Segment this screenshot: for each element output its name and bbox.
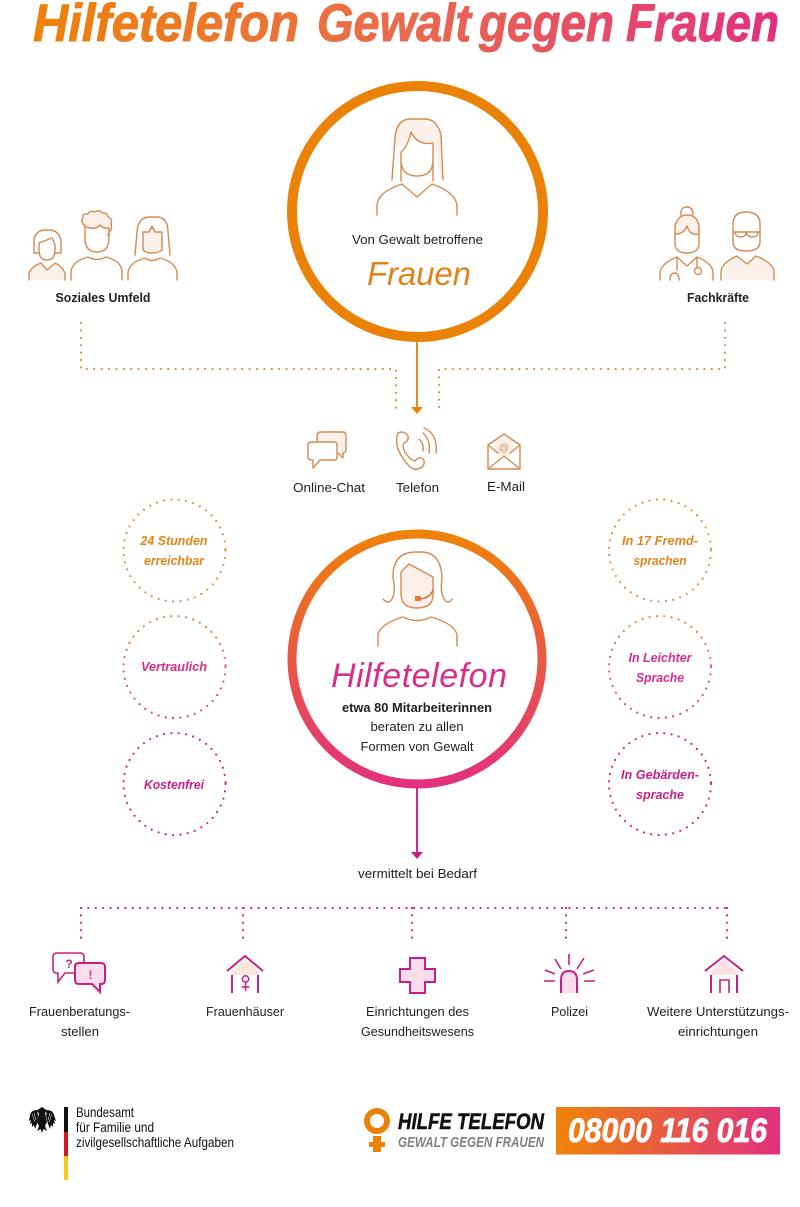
panel: affected women circle — [292, 86, 543, 337]
badge: Vertraulich: Vertraulich — [141, 660, 207, 674]
icon: speech bubbles: ! — [88, 968, 92, 982]
text: Bundesamt name — [76, 1104, 234, 1150]
text: Bundesamt name: zivilgesellschaftliche Aufgaben — [76, 1134, 234, 1150]
panel: Frauenhäuser — [206, 956, 285, 1019]
icon: speech bubbles: ? — [65, 957, 73, 971]
flag bar — [64, 1107, 68, 1180]
icon: three people — [29, 211, 177, 280]
badge: In 17 Fremdsprachen: In 17 Fremd- — [622, 534, 698, 548]
title — [33, 0, 779, 53]
text: Bundesamt name: Bundesamt — [76, 1104, 134, 1120]
badge: Kostenfrei — [124, 733, 226, 835]
badge: Vertraulich — [124, 616, 226, 718]
connector: right dotted line — [439, 323, 725, 412]
badge: In Leichter Sprache — [609, 616, 711, 718]
text: von Gewalt betroffene: Von Gewalt betroffene — [352, 232, 483, 247]
icon: doctors — [660, 207, 774, 280]
label: Einrichtungen des: Einrichtungen des — [366, 1004, 469, 1019]
label: Gesundheitswesens: Gesundheitswesens — [361, 1024, 474, 1039]
phone number box: 08000 116 016 — [568, 1112, 768, 1150]
panel: Polizei — [544, 954, 595, 1019]
text: vermittelt bei Bedarf: vermittelt bei Bedarf — [358, 866, 477, 881]
text: beraten zu allen: beraten zu allen — [370, 719, 464, 734]
arrow: to channels — [411, 341, 423, 414]
icon: telephone — [397, 428, 436, 469]
text: Hilfetelefon: Hilfetelefon — [331, 657, 507, 695]
icon: women's shelter — [227, 956, 263, 993]
text: Bundesamt name: für Familie und — [76, 1119, 154, 1135]
label: einrichtungen: einrichtungen — [678, 1024, 758, 1039]
icon: police light — [544, 954, 595, 993]
connector: left dotted line — [81, 323, 396, 412]
badge: In Gebärdensprache: In Gebärden- — [621, 768, 699, 782]
panel: contact channels — [293, 428, 525, 495]
panel: Soziales Umfeld — [29, 211, 177, 305]
label: Polizei: Polizei — [551, 1004, 588, 1019]
icon: venus symbol — [367, 1111, 387, 1152]
icon: medical cross — [400, 958, 435, 993]
badge: Kostenfrei: Kostenfrei — [144, 778, 205, 792]
text: GEWALT GEGEN FRAUEN: GEWALT GEGEN FRAUEN — [398, 1135, 544, 1151]
panel: Weitere Unterstützungseinrichtungen — [647, 956, 789, 1039]
label: Fachkräfte: Fachkräfte — [687, 290, 749, 305]
icon: advisor with headset — [378, 552, 457, 646]
text: Formen von Gewalt: Formen von Gewalt — [360, 739, 474, 754]
panel: Frauenberatungsstellen — [29, 953, 130, 1039]
badge: In Leichter Sprache: In Leichter — [628, 651, 693, 665]
icon: e-mail — [488, 434, 520, 469]
panel: Frauenberatungsstellen: stellen — [61, 1024, 99, 1039]
text: Frauen: Frauen — [367, 255, 471, 292]
badge: 24 Stunden erreichbar: 24 Stunden — [140, 534, 208, 548]
logo: Hilfetelefon — [367, 1109, 545, 1152]
badge: In Leichter Sprache: Sprache — [636, 671, 684, 685]
icon: woman — [377, 119, 457, 215]
badge: In 17 Fremdsprachen: sprachen — [634, 554, 687, 568]
panel: Gesundheitswesen — [361, 958, 474, 1039]
connector: referral dotted lines — [81, 908, 727, 938]
badge: 24 Stunden erreichbar: erreichbar — [144, 554, 205, 568]
label: Frauenhäuser: Frauenhäuser — [206, 1004, 285, 1019]
panel: Fachkräfte — [660, 207, 774, 305]
icon: e-mail: @ — [499, 443, 509, 454]
icon: federal eagle — [29, 1107, 56, 1133]
text: HILFE TELEFON: HILFE TELEFON — [398, 1109, 545, 1134]
icon: speech bubbles — [53, 953, 105, 992]
badge: 24 Stunden erreichbar — [124, 500, 226, 602]
badge: In Gebärdensprache — [609, 733, 711, 835]
label: Soziales Umfeld: Soziales Umfeld — [56, 290, 151, 305]
label: Frauenberatungsstellen: Frauenberatungs- — [29, 1004, 130, 1019]
label: Telefon: Telefon — [396, 480, 439, 495]
badge: In Gebärdensprache: sprache — [636, 788, 684, 802]
label: Online-Chat: Online-Chat — [293, 480, 365, 495]
icon: chat — [308, 432, 346, 468]
arrow: to referral — [411, 788, 423, 859]
icon: house — [705, 956, 743, 993]
logo: Bundesamt — [29, 1104, 234, 1180]
label: E-Mail: E-Mail — [487, 479, 525, 494]
label: Weitere Unterstützungs-: Weitere Unterstützungs- — [647, 1004, 789, 1019]
panel: Hilfetelefon circle — [292, 534, 542, 784]
badge: In 17 Fremdsprachen — [609, 500, 711, 602]
text: etwa 80 Mitarbeiterinnen: etwa 80 Mitarbeiterinnen — [342, 700, 492, 715]
